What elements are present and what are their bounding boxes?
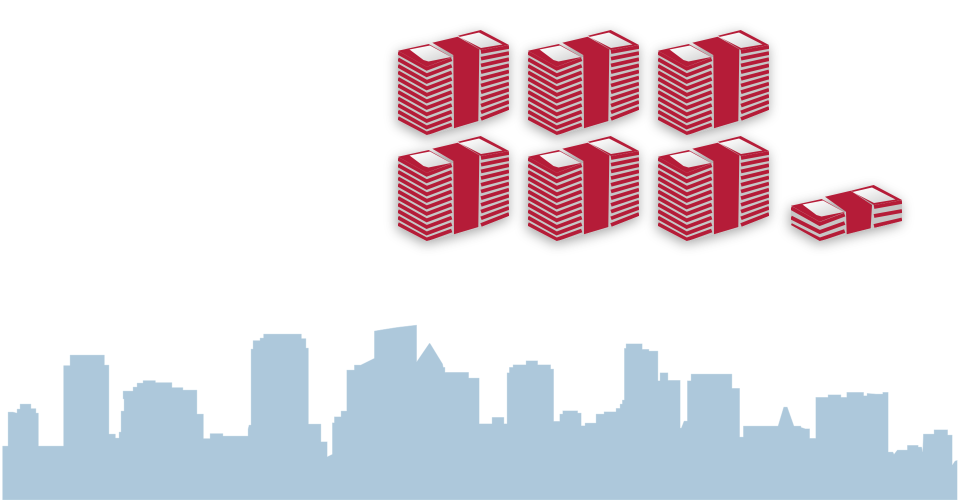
icon: money stack row 2 column 1 [398,136,509,241]
icon: money stack row 1 column 1 [398,30,509,135]
icon: partial money stack [791,185,902,241]
icon: money stack row 1 column 3 [658,30,769,135]
icon: money stack row 1 column 2 [528,30,639,135]
icon: money stack row 2 column 3 [658,136,769,241]
city skyline silhouette [2,325,957,500]
icon: money stack row 2 column 2 [528,136,639,241]
